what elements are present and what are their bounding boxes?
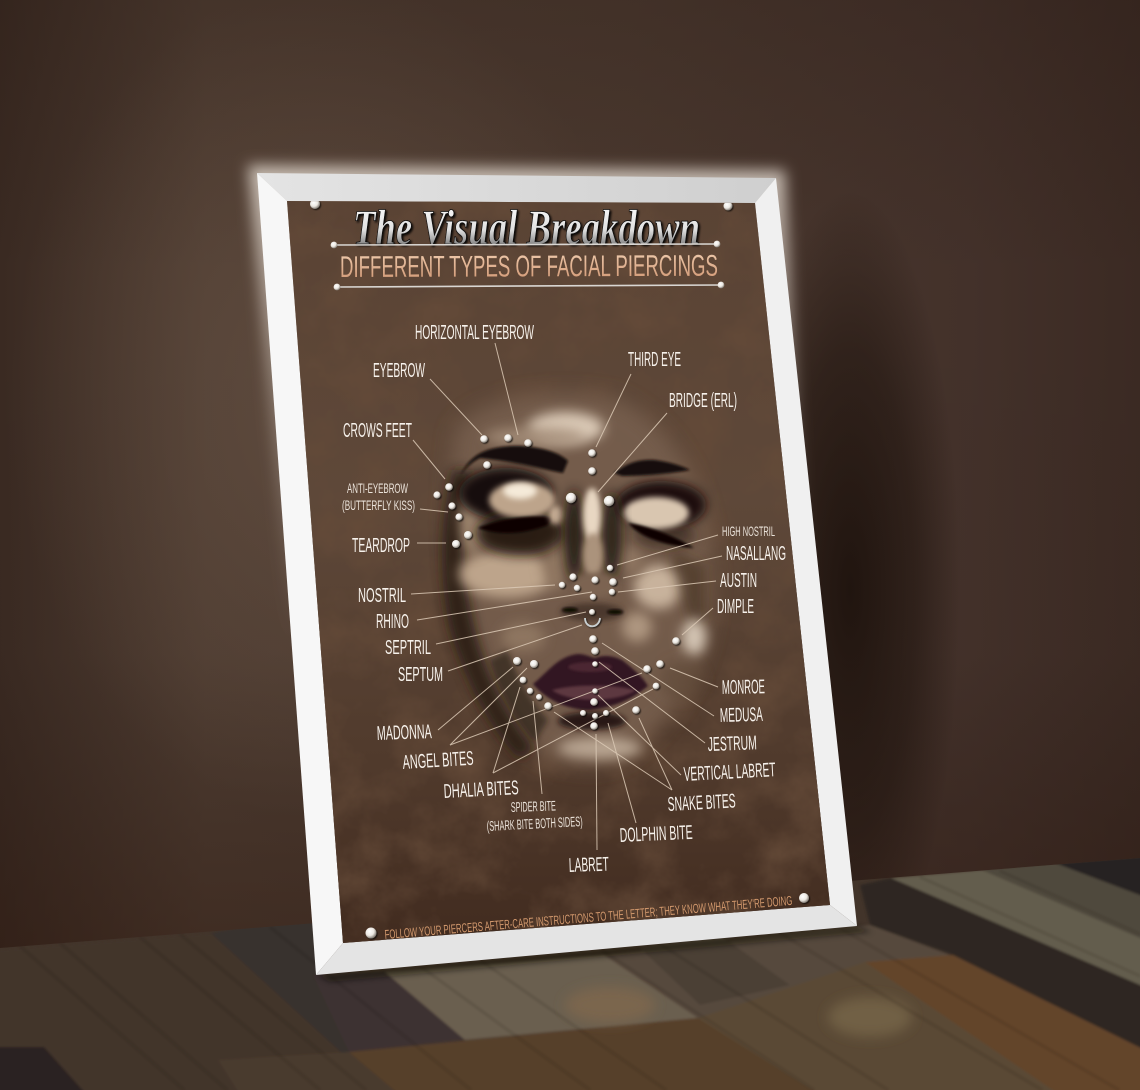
poster panel: MONROE	[722, 676, 765, 699]
label: madonna: MADONNA	[376, 721, 432, 745]
eye sockets	[459, 468, 553, 520]
label: austin: AUSTIN	[720, 570, 757, 592]
subtitle: DIFFERENT TYPES OF FACIAL PIERCINGS	[340, 250, 718, 284]
label: teardrop: TEARDROP	[352, 535, 410, 557]
label: horizontal eyebrow: HORIZONTAL EYEBROW	[415, 322, 534, 344]
floor contact shadow	[316, 926, 872, 982]
forehead light	[528, 412, 604, 444]
brows	[460, 446, 568, 476]
label: shark bite: (SHARK BITE BOTH SIDES)	[486, 813, 583, 834]
corner screws	[310, 199, 809, 938]
label: jestrum: JESTRUM	[707, 732, 757, 756]
nose	[565, 489, 583, 581]
label: snake bites: SNAKE BITES	[667, 790, 736, 816]
label: eyebrow: EYEBROW	[373, 360, 425, 382]
wood grain	[432, 970, 571, 1034]
under lip and chin	[558, 712, 626, 730]
illustration: painted face	[442, 393, 712, 766]
poster frame	[257, 173, 857, 975]
label: nostril: NOSTRIL	[358, 585, 406, 607]
skin base	[450, 393, 712, 766]
label: medusa: MEDUSA	[720, 704, 763, 727]
label: butterfly kiss: (BUTTERFLY KISS)	[342, 497, 415, 513]
label: crows feet: CROWS FEET	[343, 420, 412, 442]
title: The Visual Breakdown	[353, 199, 700, 255]
label: anti-eyebrow: ANTI-EYEBROW	[347, 480, 408, 496]
poster glow	[248, 165, 810, 640]
label: vertical labret: VERTICAL LABRET	[683, 759, 776, 786]
eyelids	[489, 482, 555, 518]
label: spider bite: SPIDER BITE	[511, 797, 556, 815]
label: septril: SEPTRIL	[385, 637, 431, 659]
label: bridge: BRIDGE (ERL)	[669, 390, 737, 412]
right cheek	[634, 565, 682, 609]
hair shadow stripe	[442, 470, 534, 760]
poster panel: NASALLANG	[726, 543, 786, 565]
title rule	[331, 241, 720, 248]
poster panel: THIRD EYE	[628, 349, 681, 371]
poster panel: DIMPLE	[717, 596, 754, 618]
label: high nostril: HIGH NOSTRIL	[722, 523, 775, 539]
label: labret: LABRET	[568, 854, 609, 877]
footer note: FOLLOW YOUR PIERCERS AFTER-CARE INSTRUCTIONS TO THE LETTER; THEY KNOW WHAT THEY'RE DOING	[384, 893, 793, 942]
left cheek	[459, 550, 555, 598]
label: angel bites: ANGEL BITES	[402, 748, 474, 774]
leader lines	[411, 343, 722, 850]
label: dhalia bites: DHALIA BITES	[443, 777, 519, 803]
lips	[533, 654, 648, 710]
floor planks	[0, 856, 1140, 1090]
septum ring	[585, 618, 600, 626]
wood knots	[565, 987, 912, 1037]
poster panel	[280, 195, 840, 955]
piercing studs	[433, 434, 680, 730]
wooden floor	[0, 850, 1140, 1090]
label: septum: SEPTUM	[398, 664, 443, 686]
label: dolphin bite: DOLPHIN BITE	[619, 822, 693, 847]
label: rhino: RHINO	[376, 611, 409, 633]
subtitle rule	[334, 282, 724, 290]
